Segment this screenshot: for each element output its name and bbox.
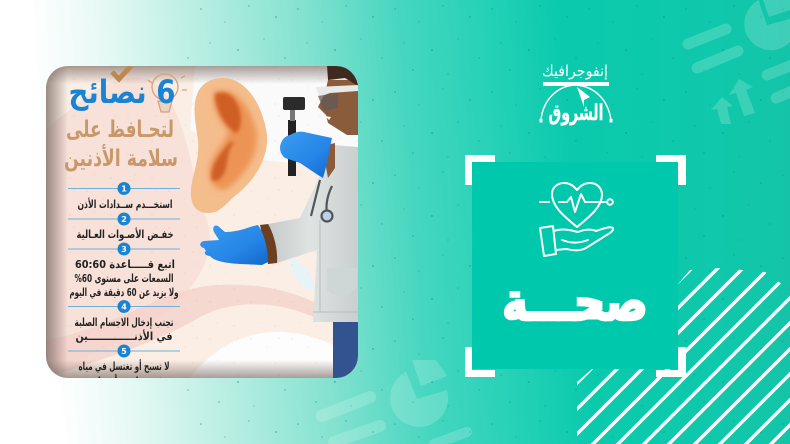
tip 5: لا تسبح أو تغتسل في مياه [78, 359, 170, 373]
doctor arm [326, 143, 335, 178]
panel: ear tips card [46, 65, 358, 388]
title: 6 نصائح [68, 73, 176, 111]
illustration: ear [191, 78, 267, 213]
icon: light bulb [148, 74, 187, 112]
stethoscope [311, 180, 332, 222]
otoscope [283, 97, 305, 176]
icon: heart in hand [540, 183, 613, 256]
doctor head [318, 80, 358, 135]
card paper background [46, 66, 358, 378]
subtitle: لتحـافظ على [66, 117, 174, 143]
doctor coat [263, 145, 358, 322]
icon: check mark [112, 66, 131, 79]
illustration: doctor [200, 65, 358, 378]
pulse line [540, 194, 606, 212]
subtitle: سلامة الأذنين [64, 143, 178, 172]
tip 4: تجنب إدخال الاجسام الصلبة [74, 316, 174, 329]
diagonal stripes [577, 268, 790, 444]
category title: صحـــة [502, 270, 648, 333]
tip 4 [68, 300, 180, 343]
tip 3: السمعات على مستوى 60% [74, 272, 174, 285]
logo: الشروق [548, 101, 604, 126]
tip 1: 1 [121, 184, 127, 194]
tip 3 [68, 242, 180, 299]
corner brackets [465, 155, 686, 377]
doctor trousers [333, 322, 358, 378]
edge shadow [46, 66, 358, 378]
decorative shapes: bottom centre [322, 360, 467, 444]
category square [472, 162, 678, 369]
tip 5: غير نظيفة أو ملوثة [84, 374, 164, 388]
tip 3: اتبع قـــــاعدة 60:60 [75, 258, 175, 271]
tip 2 [68, 212, 180, 241]
heart [552, 183, 602, 227]
tip 4: 4 [121, 302, 127, 312]
logo: إنفوجرافيك [542, 62, 608, 80]
tip 2: 2 [121, 215, 127, 224]
tip 1: استخـــدم ســدادات الأذن [78, 197, 172, 211]
subtitle [64, 117, 178, 172]
tip 2: خفـض الأصـوات العـالية [76, 227, 174, 241]
tip 3: 3 [121, 245, 127, 254]
decorative shapes: top right [688, 0, 790, 124]
tip 5 [68, 344, 180, 378]
blue glove on otoscope [280, 132, 332, 178]
tip 1 [68, 182, 180, 211]
hand [540, 226, 556, 256]
tip 5: 5 [121, 347, 127, 356]
logo [540, 62, 612, 126]
blue glove open [200, 225, 268, 265]
tip 4: في الأذنــــــــــــــين [76, 329, 172, 343]
tip 3: ولا يزيد عن 60 دقيقة في اليوم [70, 286, 179, 299]
lower arm cuff [260, 224, 277, 264]
